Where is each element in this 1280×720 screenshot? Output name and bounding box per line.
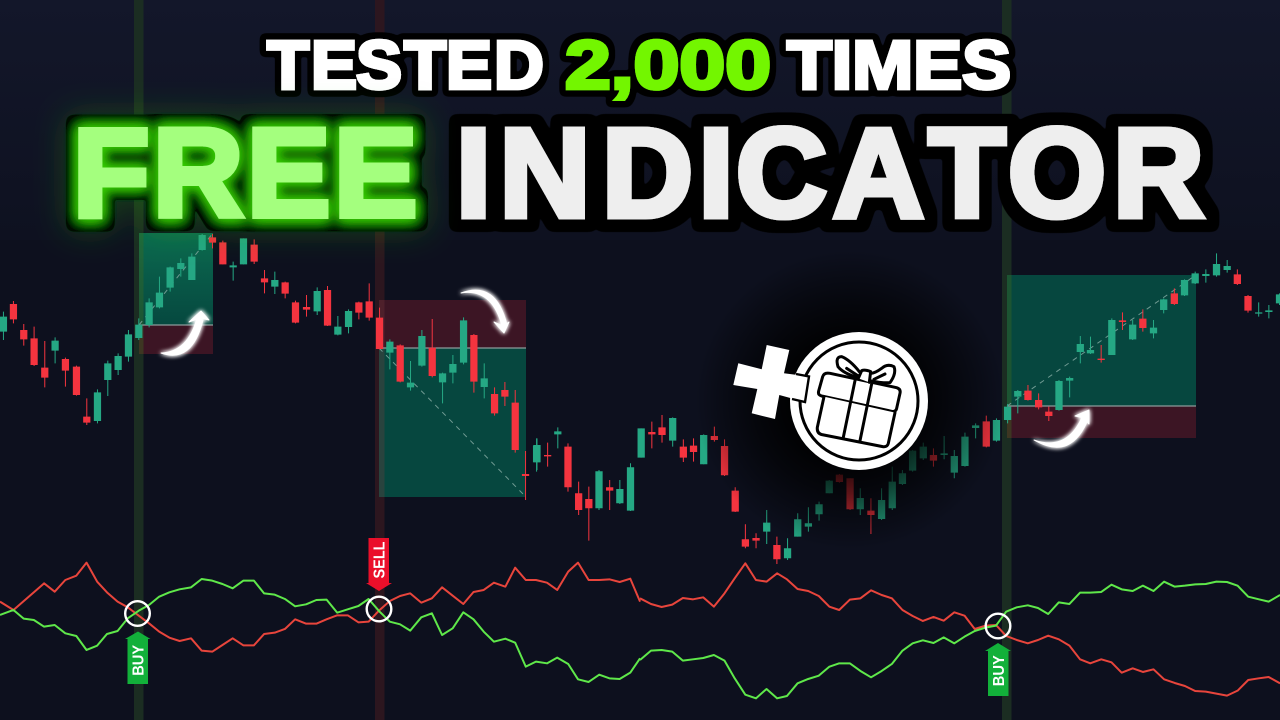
signal bands: [134, 0, 1012, 720]
curved arrow: short trade: [461, 290, 509, 333]
indicator: green line right: [640, 582, 1280, 698]
headline: indicator: INDICATOR: [456, 102, 1204, 244]
indicator: red line right: [640, 563, 1280, 696]
sell arrow label: SELL: [372, 541, 388, 578]
headline: free: FREE: [73, 104, 417, 243]
buy arrow label: second: BUY: [991, 655, 1008, 686]
gift dark glow: [695, 250, 1005, 550]
position box: first long trade: [139, 233, 213, 354]
title line: times: TIMES: [787, 26, 1011, 104]
buy arrow label: first: BUY: [131, 644, 148, 676]
icon: plus sign: [733, 345, 809, 419]
candlesticks: left section: [3, 234, 537, 500]
candlesticks: right section: [537, 253, 1280, 564]
top background tint: [0, 0, 1280, 240]
curved arrow: second long trade: [1034, 410, 1089, 447]
crossover circle: second buy: [986, 614, 1010, 638]
indicator: red line left: [0, 563, 640, 652]
crossover circle: sell: [367, 597, 391, 621]
crossover circle: first buy: [125, 601, 150, 626]
position box: short trade: [379, 300, 526, 497]
indicator: green line left: [0, 579, 640, 682]
title line: tested: TESTED: [267, 26, 544, 104]
curved arrow: first long trade: [161, 311, 209, 355]
gift badge: [733, 332, 928, 470]
buy arrow label: first: [125, 632, 150, 684]
buy arrow label: second: [985, 643, 1011, 696]
icon: gift box: [817, 357, 900, 447]
position box: second long trade: [1007, 275, 1196, 438]
sell arrow label: [366, 538, 392, 591]
title line: 2,000: 2,000: [565, 26, 771, 104]
